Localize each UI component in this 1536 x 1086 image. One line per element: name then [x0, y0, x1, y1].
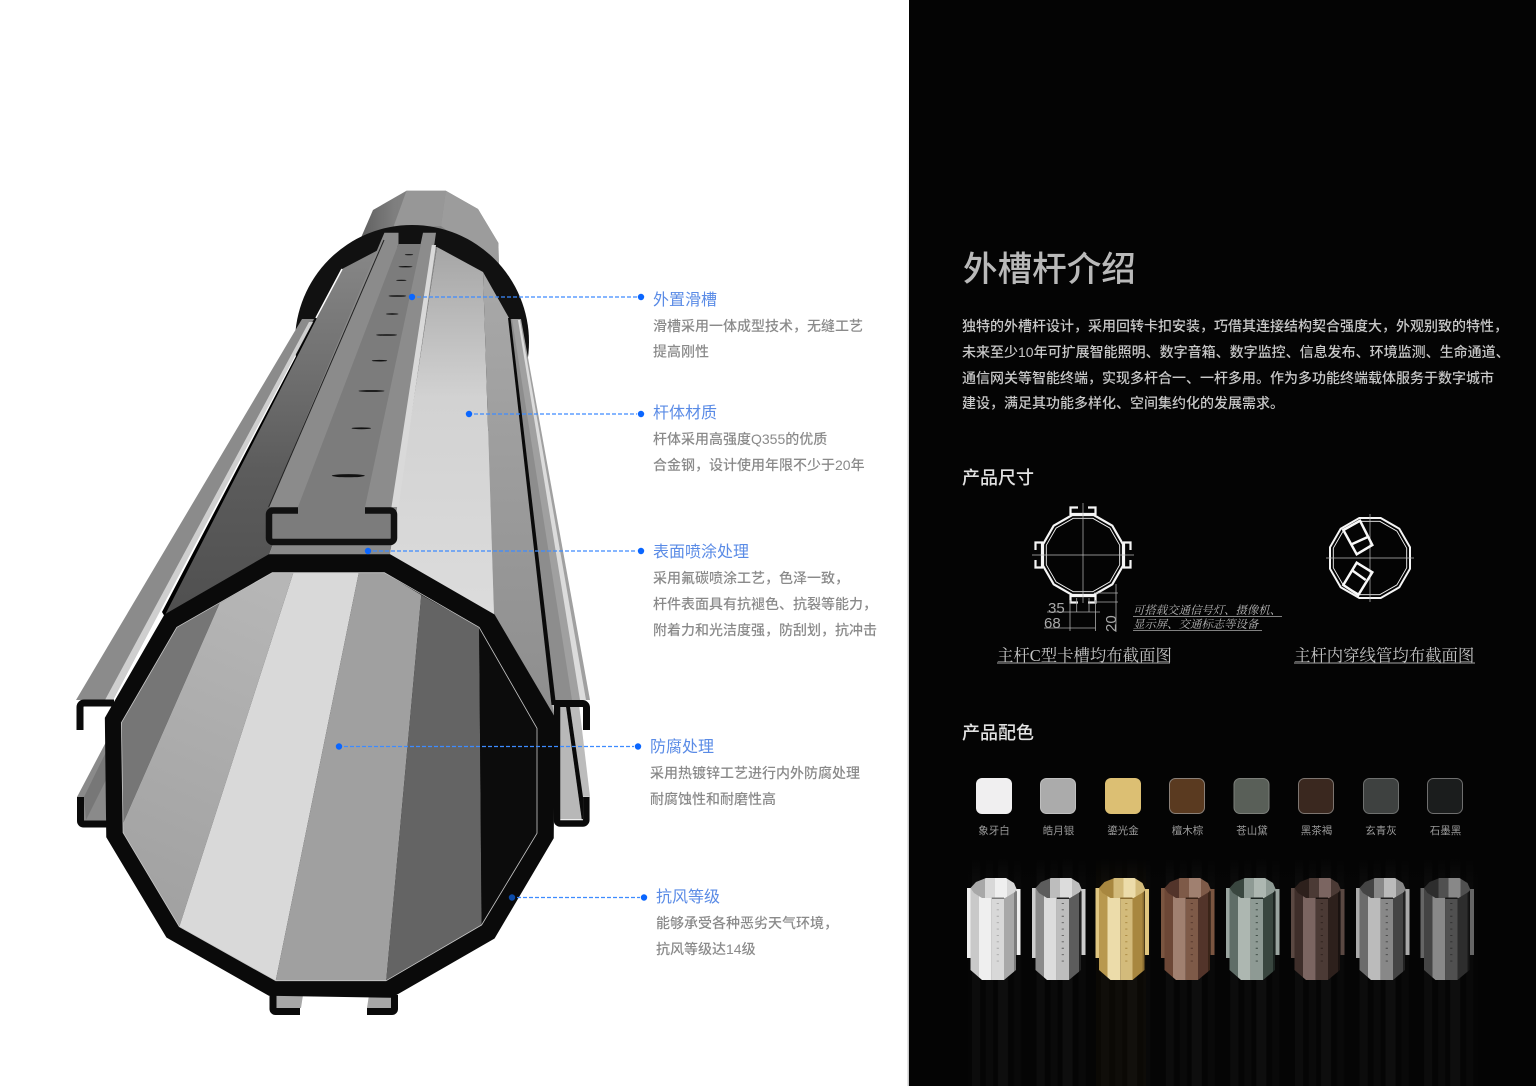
callout: external slide: 滑槽采用一体成型技术，无缝工艺 — [653, 318, 863, 334]
callout: anti-corrosion: 耐腐蚀性和耐磨性高 — [650, 791, 776, 807]
swatch: ivory white — [976, 778, 1012, 837]
callout: wind resistance: 抗风等级达14级 — [656, 941, 756, 957]
swatch: moon silver: 皓月银 — [1043, 824, 1075, 837]
pole: black tea brown — [1291, 876, 1344, 985]
intro paragraph: 通信网关等智能终端，实现多杆合一、一杆多用。作为多功能终端载体服务于数字城市 — [962, 370, 1494, 386]
callout: anti-corrosion: 防腐处理 — [650, 738, 714, 756]
diagram: internal conduit cross section — [1326, 514, 1414, 602]
heading: product size: 产品尺寸 — [962, 468, 1034, 488]
streaked backdrop behind colour poles — [968, 858, 1478, 1086]
swatch: ivory white: 象牙白 — [978, 824, 1010, 837]
callout: surface coating — [365, 543, 877, 638]
intro paragraph: 独特的外槽杆设计，采用回转卡扣安装，巧借其连接结构契合强度大，外观别致的特性， — [962, 318, 1508, 334]
callout: body material: 合金钢，设计使用年限不少于20年 — [653, 457, 865, 473]
callout: wind resistance: 能够承受各种恶劣天气环境， — [656, 915, 838, 931]
open end: black tube wall — [106, 555, 554, 997]
swatch: moon silver — [1040, 778, 1076, 837]
swatch: gilded gold — [1105, 778, 1141, 837]
callout: anti-corrosion: 采用热镀锌工艺进行内外防腐处理 — [650, 765, 860, 781]
heading: product colours: 产品配色 — [962, 723, 1034, 743]
callout: body material: 杆体材质 — [653, 404, 717, 422]
bottom rails — [273, 995, 394, 1012]
callout: external slide: 提高刚性 — [653, 344, 709, 360]
colour swatches — [976, 778, 1462, 837]
callout: body material — [466, 404, 865, 473]
right side rail — [508, 319, 591, 824]
left side rail — [76, 318, 318, 824]
intro paragraph — [962, 318, 1510, 411]
C-shaped sliding groove — [269, 233, 436, 542]
colour pole renderings — [967, 876, 1474, 985]
caption: conduit section: 主杆内穿线管均布截面图 — [1294, 646, 1474, 665]
diagram note: 显示屏、交通标志等设备 — [1133, 618, 1260, 631]
intro paragraph: 建设，满足其功能多样化、空间集约化的发展需求。 — [962, 395, 1284, 411]
swatch: mountain green-grey: 苍山黛 — [1236, 824, 1268, 837]
pole: mountain green-grey — [1226, 876, 1280, 985]
diagram: C-groove cross section: 20 — [1103, 615, 1120, 632]
swatch: black tea brown: 黑茶褐 — [1301, 824, 1332, 837]
groove slots — [332, 254, 413, 477]
swatch: mountain green-grey — [1234, 778, 1269, 837]
swatch: gilded gold: 鎏光金 — [1107, 824, 1139, 837]
diagram note: 可搭载交通信号灯、摄像机、 — [1133, 604, 1281, 617]
swatch: sandalwood brown: 檀木棕 — [1172, 824, 1204, 837]
dark panel background — [909, 0, 1536, 1086]
far end of the pole — [360, 191, 499, 270]
title: 外槽杆介绍 — [963, 251, 1136, 289]
pole: gilded gold — [1096, 876, 1149, 985]
callout: wind resistance: 抗风等级 — [656, 888, 720, 906]
swatch: dark slate grey — [1364, 778, 1398, 837]
callout: anti-corrosion — [336, 738, 860, 807]
callout: surface coating: 附着力和光洁度强，防刮划，抗冲击 — [653, 622, 877, 638]
callout: external slide — [409, 291, 863, 360]
swatch: sandalwood brown — [1170, 778, 1204, 837]
diagram: C-groove cross section — [1032, 503, 1134, 632]
callout: surface coating: 表面喷涂处理 — [653, 543, 749, 561]
pole: sandalwood brown — [1161, 876, 1214, 985]
swatch: graphite black: 石墨黑 — [1430, 825, 1461, 837]
callout: wind resistance — [509, 888, 838, 957]
callout: external slide: 外置滑槽 — [653, 291, 717, 309]
caption: C-groove section: 主杆C型卡槽均布截面图 — [997, 646, 1172, 665]
black mounting ring — [295, 225, 529, 459]
illustration: cutaway of the outer-slot pole — [76, 191, 591, 1011]
callout: body material: 杆体采用高强度Q355的优质 — [653, 431, 827, 447]
callout: surface coating: 杆件表面具有抗褪色、抗裂等能力， — [653, 596, 877, 612]
open end: interior facets — [121, 573, 537, 981]
pole: dark slate grey — [1356, 876, 1410, 985]
diagram: C-groove cross section: 68 — [1044, 615, 1061, 632]
outer facets of the pole body — [165, 247, 556, 717]
pole: graphite black — [1420, 876, 1474, 985]
pole: ivory white — [967, 876, 1020, 985]
swatch: black tea brown — [1298, 778, 1334, 837]
diagram note — [1133, 604, 1282, 631]
diagram: C-groove cross section: 35 — [1048, 600, 1065, 617]
intro paragraph: 未来至少10年可扩展智能照明、数字音箱、数字监控、信息发布、环境监测、生命通道、 — [962, 344, 1510, 360]
callout: surface coating: 采用氟碳喷涂工艺，色泽一致， — [653, 570, 849, 586]
swatch: graphite black — [1428, 778, 1462, 837]
swatch: dark slate grey: 玄青灰 — [1365, 824, 1397, 837]
pole: moon silver — [1032, 876, 1086, 985]
